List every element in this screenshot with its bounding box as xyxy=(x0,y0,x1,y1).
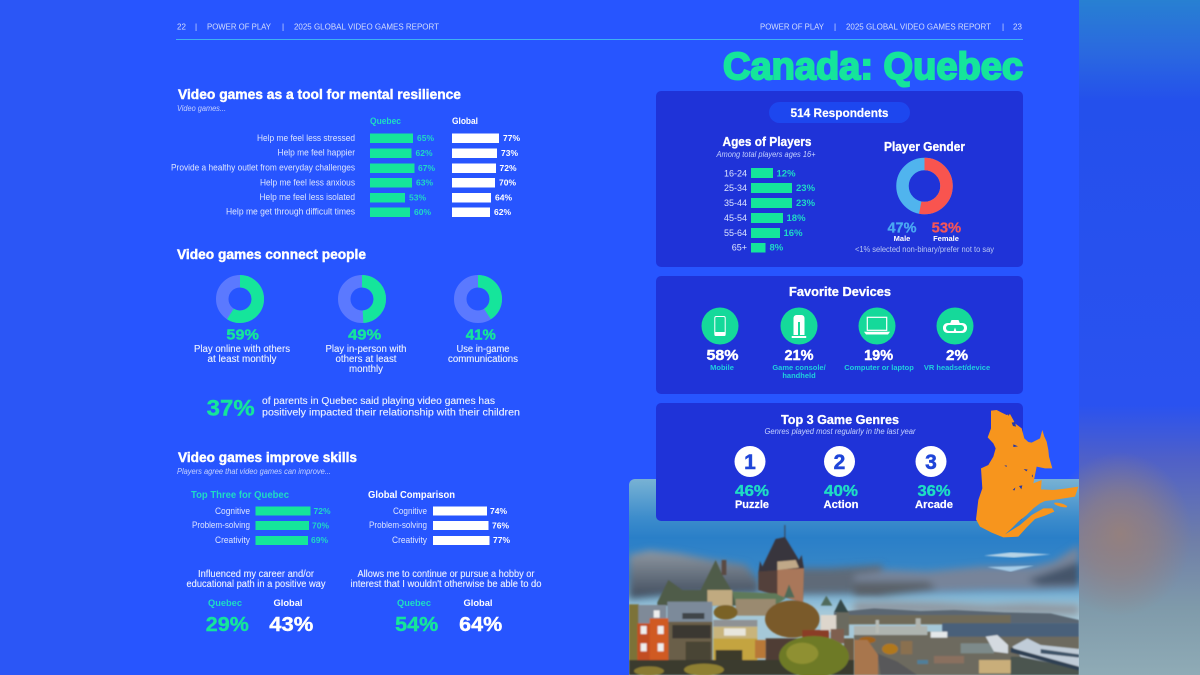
stat: hobby or interest: 64% xyxy=(459,614,502,636)
genre: arcade: Arcade xyxy=(915,499,953,511)
panel: favorite devices xyxy=(656,276,1023,394)
section: mental resilience xyxy=(171,86,520,217)
stat: career influence: 43% xyxy=(269,614,314,636)
bar chart: resilience comparison: 77% xyxy=(503,133,520,143)
page header right xyxy=(760,22,1022,32)
stat: 49% in-person: Play in-person with xyxy=(326,344,406,355)
bar chart: resilience comparison: Help me feel less anxious xyxy=(260,178,355,188)
bar chart: resilience comparison: 63% xyxy=(416,178,433,188)
bar chart: global comparison: 77% xyxy=(493,535,510,545)
stat: hobby or interest: 54% xyxy=(395,614,438,636)
page header right: 23 xyxy=(1013,22,1022,32)
bar chart: global comparison: Global Comparison xyxy=(368,490,455,501)
heading: top 3 genres: Top 3 Game Genres xyxy=(781,412,899,427)
bar chart: resilience comparison: 53% xyxy=(409,192,426,202)
stat: hobby or interest xyxy=(350,569,542,636)
bar chart: player ages: 25-34 xyxy=(724,183,747,193)
heading: player gender: Player Gender xyxy=(884,139,965,154)
subheading: video games: Video games... xyxy=(177,104,226,113)
page header right: POWER OF PLAY xyxy=(760,22,825,32)
bar chart: resilience comparison: Help me feel happier xyxy=(278,148,355,158)
bar chart: resilience comparison: Help me get through difficult times xyxy=(226,206,355,216)
donut: 59% xyxy=(222,281,258,317)
stat: VR 2%: 2% xyxy=(946,347,968,364)
stat: career influence xyxy=(186,569,326,636)
bar chart: player ages: 23% xyxy=(796,198,816,209)
stat: hobby or interest: Quebec xyxy=(397,598,431,609)
stat: 49% in-person: others at least xyxy=(336,354,397,365)
donut: 41% xyxy=(460,281,496,317)
column header: Global: Global xyxy=(452,116,478,126)
page header left: | xyxy=(282,22,284,32)
title: Canada: Quebec xyxy=(723,46,1023,88)
bar chart: player ages: 65+ xyxy=(732,242,747,252)
stat: mobile 58%: 58% xyxy=(706,347,738,364)
bar chart: resilience comparison: 64% xyxy=(495,192,512,202)
stat: 49% in-person: monthly xyxy=(349,364,383,375)
icon: mobile xyxy=(702,308,738,344)
bar chart: top three for Quebec: Top Three for Quebec xyxy=(191,490,289,501)
stat: mobile 58%: Mobile xyxy=(710,363,734,372)
heading: improve skills: Video games improve skills xyxy=(178,449,357,465)
bar chart: global comparison: Creativity xyxy=(392,535,427,545)
callout: 37% of parents: 37% xyxy=(207,396,255,421)
bar chart: resilience comparison xyxy=(171,133,520,217)
stat: career influence: Global xyxy=(274,598,302,609)
stat: female 53%: 53% xyxy=(932,220,961,236)
genre: action: Action xyxy=(824,499,859,511)
stat: mobile 58% xyxy=(706,347,738,372)
stat: career influence: educational path in a positive way xyxy=(186,579,326,590)
right blurred margin xyxy=(1048,0,1200,675)
stat: hobby or interest: Allows me to continue or pursue a hobby or xyxy=(358,569,535,580)
stat: console 21%: handheld xyxy=(782,371,816,380)
stat: 41% communications: communications xyxy=(448,354,518,365)
stat: 41% communications: Use in-game xyxy=(456,344,510,355)
stat: hobby or interest: Global xyxy=(464,598,492,609)
stat: career influence: Quebec xyxy=(208,598,242,609)
stat: 41% communications: 41% xyxy=(466,326,496,343)
bar chart: global comparison: 76% xyxy=(492,520,509,530)
bar chart: player ages: 35-44 xyxy=(724,198,747,208)
column header: Quebec: Quebec xyxy=(370,116,401,126)
pill: 514 respondents: 514 Respondents xyxy=(790,106,889,120)
map: Quebec province xyxy=(976,410,1078,537)
bar chart: resilience comparison: 65% xyxy=(417,133,434,143)
stat: 59% online xyxy=(194,326,290,365)
heading: connect people: Video games connect people xyxy=(177,246,366,262)
genre: puzzle: 1 xyxy=(744,451,756,474)
stat: 41% communications xyxy=(448,326,518,365)
page header right: 2025 GLOBAL VIDEO GAMES REPORT xyxy=(846,22,991,32)
stat: female 53%: Female xyxy=(933,234,959,243)
bar chart: player ages: 12% xyxy=(776,168,796,180)
callout: 37% of parents xyxy=(207,396,520,421)
bar chart: player ages: 23% xyxy=(796,183,816,194)
heading: mental resilience: Video games as a tool for mental resilience xyxy=(178,86,461,102)
bar chart: player ages: 16% xyxy=(784,228,803,239)
genre: action: 40% xyxy=(824,483,858,500)
bar chart: player ages: 18% xyxy=(786,213,806,224)
callout: 37% of parents: of parents in Quebec said playing video games has xyxy=(262,396,495,407)
subheading: among total players: Among total players ages 16+ xyxy=(716,150,816,159)
genre: puzzle: 46% xyxy=(735,483,769,500)
footnote: gender: <1% selected non-binary/prefer not to say xyxy=(855,245,994,254)
stat: 59% online: 59% xyxy=(226,326,259,343)
panel: respondents and demographics xyxy=(656,91,1023,267)
bar chart: global comparison: Problem-solving xyxy=(369,520,427,530)
stat: console 21%: Game console/ xyxy=(772,363,827,372)
subheading: players agree: Players agree that video games can improve... xyxy=(177,467,331,476)
stat: male 47%: Male xyxy=(894,234,910,243)
bar chart: top three for Quebec: 70% xyxy=(312,520,329,530)
stat: console 21% xyxy=(772,347,827,380)
stat: 49% in-person: 49% xyxy=(348,326,381,343)
bar chart: top three for Quebec xyxy=(191,490,331,545)
bar chart: resilience comparison: Provide a healthy outlet from everyday challenges xyxy=(171,162,355,172)
donut: 49% xyxy=(344,281,380,317)
genre: action: 2 xyxy=(834,451,845,474)
icon: VR headset xyxy=(936,308,974,344)
bar chart: top three for Quebec: Creativity xyxy=(215,535,250,545)
bar chart: resilience comparison: 67% xyxy=(418,163,435,173)
stat: career influence: Influenced my career and/or xyxy=(198,569,315,580)
donut: player gender xyxy=(902,164,946,208)
page header right: | xyxy=(834,22,836,32)
genre: puzzle xyxy=(734,446,769,511)
bar chart: resilience comparison: 73% xyxy=(501,148,518,158)
bar chart: global comparison: Cognitive xyxy=(393,506,427,516)
stat: hobby or interest: interest that I wouldn't otherwise be able to do xyxy=(350,579,542,590)
stat: computer 19% xyxy=(844,347,914,372)
icon: laptop xyxy=(858,308,896,344)
stat: 59% online: at least monthly xyxy=(208,354,276,365)
bar chart: player ages xyxy=(724,168,816,254)
genre: arcade: 36% xyxy=(918,483,950,500)
bar chart: top three for Quebec: Cognitive xyxy=(215,506,250,516)
genre: puzzle: Puzzle xyxy=(735,499,769,511)
bar chart: top three for Quebec: 72% xyxy=(314,506,331,516)
section: improve skills xyxy=(177,449,542,636)
icon: game console xyxy=(780,308,818,344)
bar chart: top three for Quebec: Problem-solving xyxy=(192,520,250,530)
bar chart: resilience comparison: 62% xyxy=(416,148,433,158)
page header left xyxy=(177,22,439,32)
bar chart: player ages: 55-64 xyxy=(724,228,747,238)
stat: computer 19%: 19% xyxy=(864,347,893,364)
stat: VR 2%: VR headset/device xyxy=(924,363,990,372)
stat: computer 19%: Computer or laptop xyxy=(844,363,914,372)
bar chart: player ages: 16-24 xyxy=(724,168,747,178)
page header left: POWER OF PLAY xyxy=(207,22,272,32)
genre: arcade: 3 xyxy=(925,451,937,474)
stat: female 53% xyxy=(932,220,961,243)
bar chart: resilience comparison: 60% xyxy=(414,207,431,217)
bar chart: player ages: 8% xyxy=(770,242,784,254)
bar chart: resilience comparison: Help me feel less isolated xyxy=(260,192,355,202)
genre: action xyxy=(824,446,859,511)
page header right: | xyxy=(1002,22,1004,32)
bar chart: global comparison: 74% xyxy=(490,506,507,516)
bar chart: resilience comparison: 72% xyxy=(500,163,517,173)
heading: ages of players: Ages of Players xyxy=(722,134,812,149)
bar chart: global comparison xyxy=(368,490,510,545)
bar chart: player ages: 45-54 xyxy=(724,213,747,223)
genre: arcade xyxy=(915,446,953,511)
left blurred margin xyxy=(0,0,120,675)
pill: 514 respondents xyxy=(769,102,910,123)
bar chart: resilience comparison: 62% xyxy=(494,207,511,217)
heading: favorite devices: Favorite Devices xyxy=(789,284,891,299)
photo: Quebec City skyline xyxy=(629,479,1079,675)
page header left: | xyxy=(195,22,197,32)
bar chart: resilience comparison: 70% xyxy=(499,178,516,188)
page header left: 22 xyxy=(177,22,186,32)
stat: male 47%: 47% xyxy=(888,220,917,236)
stat: VR 2% xyxy=(924,347,990,372)
bar chart: resilience comparison: Help me feel less stressed xyxy=(257,133,355,143)
subheading: genres played: Genres played most regularly in the last year xyxy=(764,427,916,436)
section: connect people xyxy=(177,246,520,421)
panel: top 3 game genres xyxy=(656,403,1023,521)
stat: 59% online: Play online with others xyxy=(194,344,290,355)
callout: 37% of parents: positively impacted their relationship with their children xyxy=(262,408,520,418)
bar chart: top three for Quebec: 69% xyxy=(311,535,328,545)
stat: console 21%: 21% xyxy=(784,347,814,364)
page header left: 2025 GLOBAL VIDEO GAMES REPORT xyxy=(294,22,439,32)
stat: career influence: 29% xyxy=(206,614,249,636)
stat: 49% in-person xyxy=(326,326,406,375)
